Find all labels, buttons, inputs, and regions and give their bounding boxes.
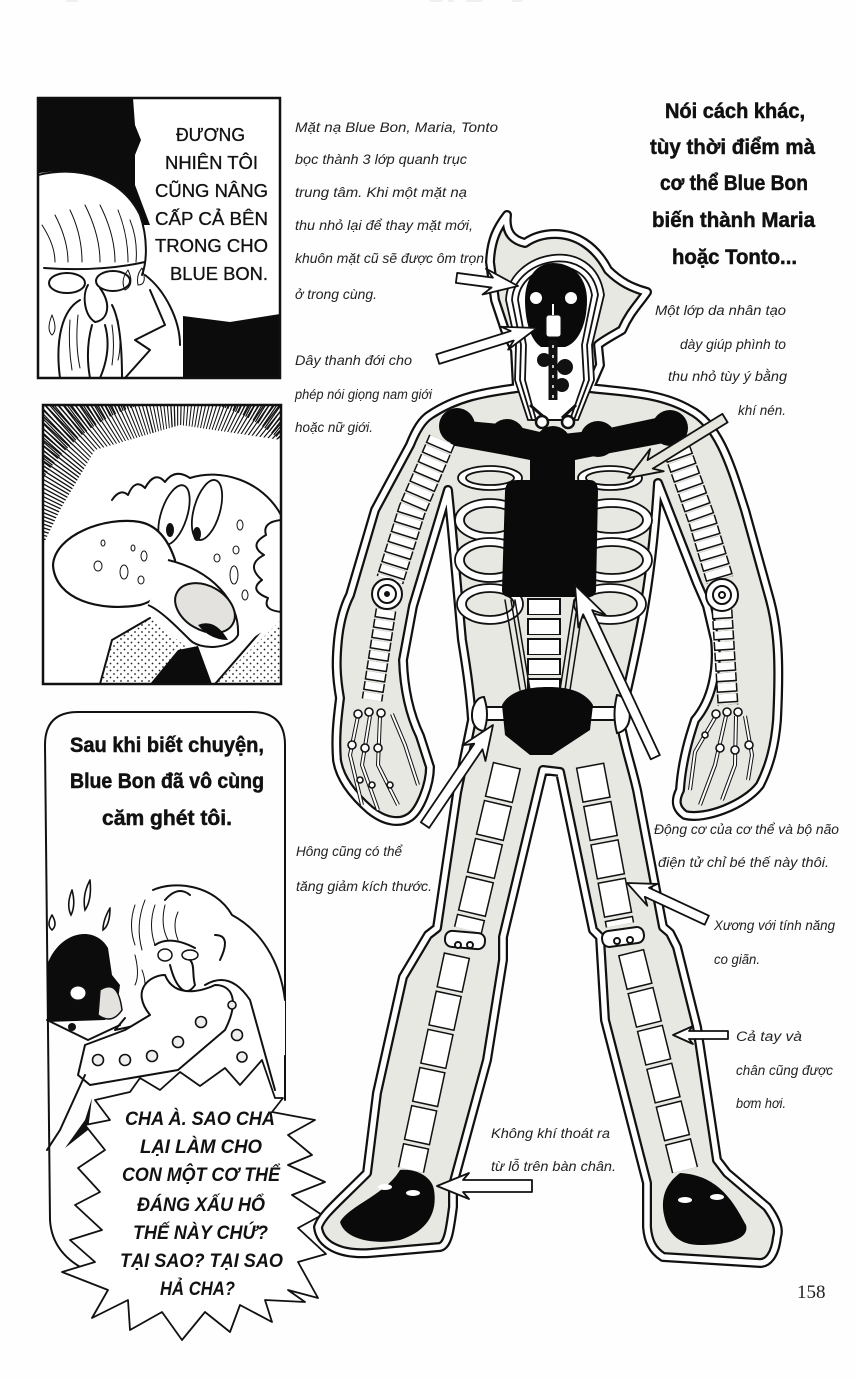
- note: limbs: [736, 1029, 833, 1111]
- speech text: CŨNG NÂNG: [155, 180, 268, 201]
- big nose: [53, 521, 175, 607]
- caption: [70, 734, 264, 830]
- eyes: [158, 484, 191, 545]
- pelvis block: [502, 687, 593, 755]
- arrow: limbs inflated: [673, 1026, 728, 1044]
- arrow: voice box: [434, 317, 541, 371]
- bold narration: Nói cách khác,: [665, 100, 805, 123]
- caption: căm ghét tôi.: [102, 807, 232, 830]
- radiating hatch lines: [44, 406, 280, 543]
- note: motor and brain: Động cơ của cơ thể và bộ não: [654, 822, 839, 837]
- shout burst: TẠI SAO? TẠI SAO: [120, 1251, 283, 1272]
- right leg bones: [590, 765, 685, 1170]
- shout burst: [62, 1060, 326, 1340]
- knee joints: [444, 926, 645, 950]
- chest box: motor and brain: [502, 480, 598, 597]
- note: vocal cords: [294, 353, 433, 435]
- bold narration: hoặc Tonto...: [672, 246, 797, 269]
- professor head: [30, 171, 183, 378]
- arrow: motor and brain: [561, 579, 669, 764]
- arrow: extendable bone: [622, 872, 712, 931]
- black tie: [150, 646, 212, 684]
- note: motor and brain: điện tử chỉ bé thế này thôi.: [658, 855, 829, 870]
- note: foot vent: Không khí thoát ra: [491, 1126, 611, 1141]
- left leg bones: [411, 765, 507, 1170]
- caption: Sau khi biết chuyện,: [70, 734, 264, 757]
- right hand bones: [690, 708, 753, 805]
- left elbow joint: [372, 579, 402, 609]
- speech text: NHIÊN TÔI: [165, 152, 258, 173]
- note: hips: [296, 844, 432, 894]
- shout burst: THẾ NÀY CHỨ?: [133, 1222, 268, 1244]
- father character: [47, 885, 285, 1150]
- shoulder frame: [439, 408, 688, 482]
- note: artificial skin: dày giúp phình to: [680, 337, 786, 352]
- panel 3: argument scene: [45, 712, 326, 1340]
- sweat drops: [49, 880, 110, 930]
- note: mask layers: bọc thành 3 lớp quanh trục: [295, 152, 467, 167]
- note: vocal cords: phép nói giọng nam giới: [294, 387, 433, 402]
- shout burst: LẠI LÀM CHO: [140, 1136, 262, 1158]
- cyborg body diagram: [318, 215, 778, 1263]
- right foot: [663, 1173, 746, 1245]
- shout burst: HẢ CHA?: [160, 1278, 235, 1300]
- note: artificial skin: [655, 303, 788, 418]
- page number: 158: [797, 1282, 826, 1303]
- arrow: foot vent: [437, 1173, 532, 1199]
- panel 1: professor and speech bubble: [30, 98, 280, 378]
- son character: [47, 934, 200, 1040]
- note: hips: tăng giảm kích thước.: [296, 879, 432, 894]
- hip joints: [472, 695, 630, 733]
- speech text: BLUE BON.: [170, 264, 268, 284]
- note: mask layers: Mặt nạ Blue Bon, Maria, Tonto: [295, 120, 499, 135]
- ribs: [455, 466, 652, 624]
- hands and sleeve with buttons: [78, 975, 233, 1085]
- note: motor and brain: [654, 822, 839, 870]
- note: mask layers: thu nhỏ lại để thay mặt mới,: [295, 218, 473, 233]
- note: limbs: Cả tay và: [736, 1029, 803, 1044]
- note: bones: co giãn.: [714, 952, 760, 967]
- right arm bones: [677, 450, 728, 705]
- note: artificial skin: Một lớp da nhân tạo: [655, 303, 787, 318]
- bold narration: tùy thời điểm mà: [650, 136, 815, 159]
- note: bones: [713, 918, 835, 967]
- shout burst: ĐÁNG XẤU HỔ: [137, 1194, 265, 1216]
- black inner face: [525, 263, 587, 347]
- note: vocal cords: Dây thanh đới cho: [295, 353, 413, 368]
- panel 2: startled professor: [42, 404, 282, 686]
- note: artificial skin: thu nhỏ tùy ý bằng: [668, 369, 788, 384]
- shout burst: CHA À. SAO CHA: [125, 1108, 275, 1130]
- note: mask layers: [295, 120, 499, 302]
- body outline: [318, 215, 778, 1263]
- caption: Blue Bon đã vô cùng: [70, 770, 264, 793]
- bold narration: [650, 100, 815, 269]
- shout burst: CON MỘT CƠ THỂ: [122, 1164, 281, 1186]
- head with curly hair: [53, 472, 281, 652]
- note: mask layers: ở trong cùng.: [295, 287, 377, 302]
- spine segments: [505, 598, 584, 690]
- note: limbs: chân cũng được: [736, 1063, 833, 1078]
- black background: [38, 98, 280, 378]
- speech text: [155, 125, 268, 284]
- arrow: artificial skin: [621, 407, 732, 489]
- voice box mechanism: [530, 304, 576, 428]
- left hand bones: [348, 708, 418, 810]
- open mouth: [148, 560, 238, 647]
- note: foot vent: [491, 1126, 616, 1174]
- note: limbs: bơm hơi.: [736, 1096, 786, 1111]
- left foot: [340, 1170, 435, 1242]
- arrow: face layers: [455, 265, 520, 299]
- right elbow joint: [706, 579, 738, 611]
- arrow: hip: [413, 717, 505, 833]
- bold narration: biến thành Maria: [652, 209, 815, 232]
- note: mask layers: khuôn mặt cũ sẽ được ôm trọn: [295, 251, 484, 266]
- speech text: CẤP CẢ BÊN: [155, 208, 268, 229]
- note: hips: Hông cũng có thể: [296, 844, 403, 859]
- arrows: [413, 265, 732, 1199]
- note: foot vent: từ lỗ trên bàn chân.: [491, 1159, 616, 1174]
- bold narration: cơ thể Blue Bon: [660, 172, 808, 195]
- dotted jacket: [100, 605, 281, 684]
- speech text: ĐƯƠNG: [176, 125, 245, 145]
- note: mask layers: trung tâm. Khi một mặt nạ: [295, 185, 468, 200]
- head concentric layers: [506, 255, 604, 420]
- note: artificial skin: khí nén.: [738, 403, 786, 418]
- left arm bones: [372, 440, 442, 700]
- note: bones: Xương với tính năng: [713, 918, 835, 933]
- note: vocal cords: hoặc nữ giới.: [295, 420, 373, 435]
- speech text: TRONG CHO: [155, 236, 268, 256]
